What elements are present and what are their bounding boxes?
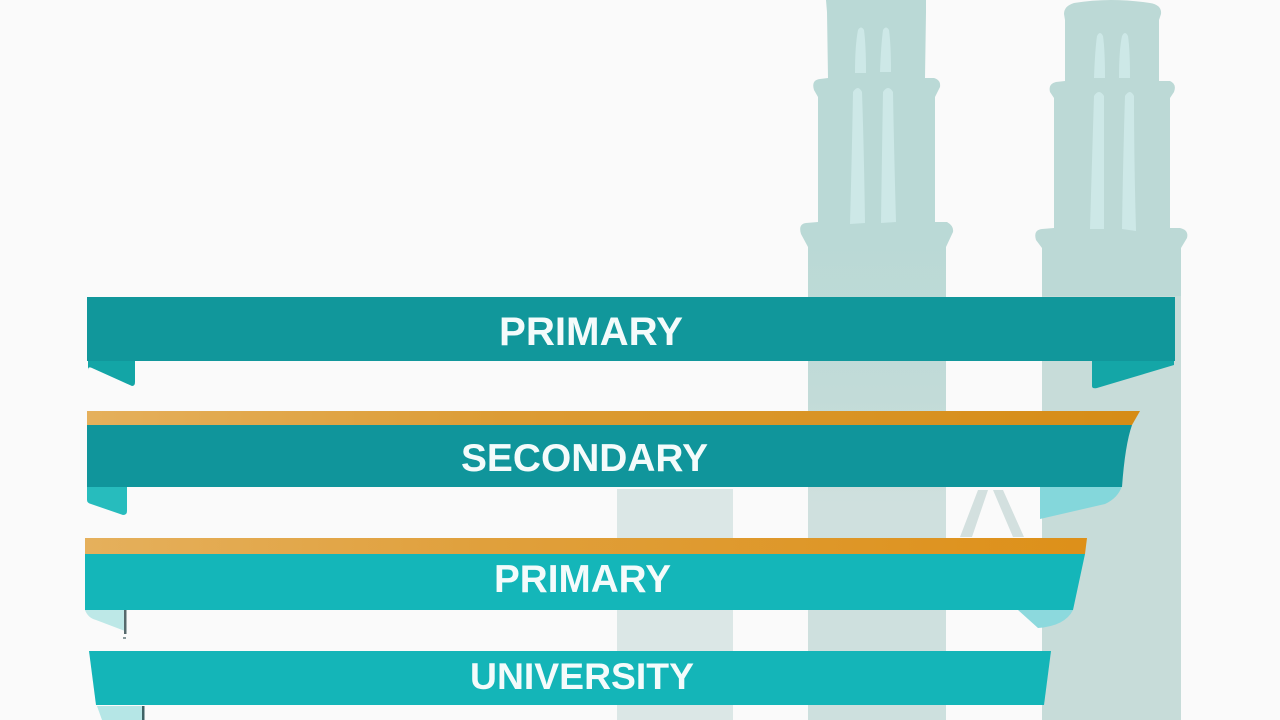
ribbon: primary, top [87, 297, 1175, 388]
label: secondary: SECONDARY [461, 437, 708, 480]
label: university: UNIVERSITY [470, 655, 694, 697]
label: primary: PRIMARY [499, 310, 683, 354]
label: primary: PRIMARY [494, 558, 671, 601]
ribbon: university [89, 651, 1051, 720]
tower: small background tower [617, 489, 733, 720]
ribbon: primary, lower [85, 538, 1087, 639]
tower: left minaret silhouette [800, 0, 953, 720]
tower: right minaret silhouette [1035, 0, 1187, 720]
icon: pale A-frame strut [960, 490, 1024, 537]
ribbon: secondary [87, 411, 1140, 519]
